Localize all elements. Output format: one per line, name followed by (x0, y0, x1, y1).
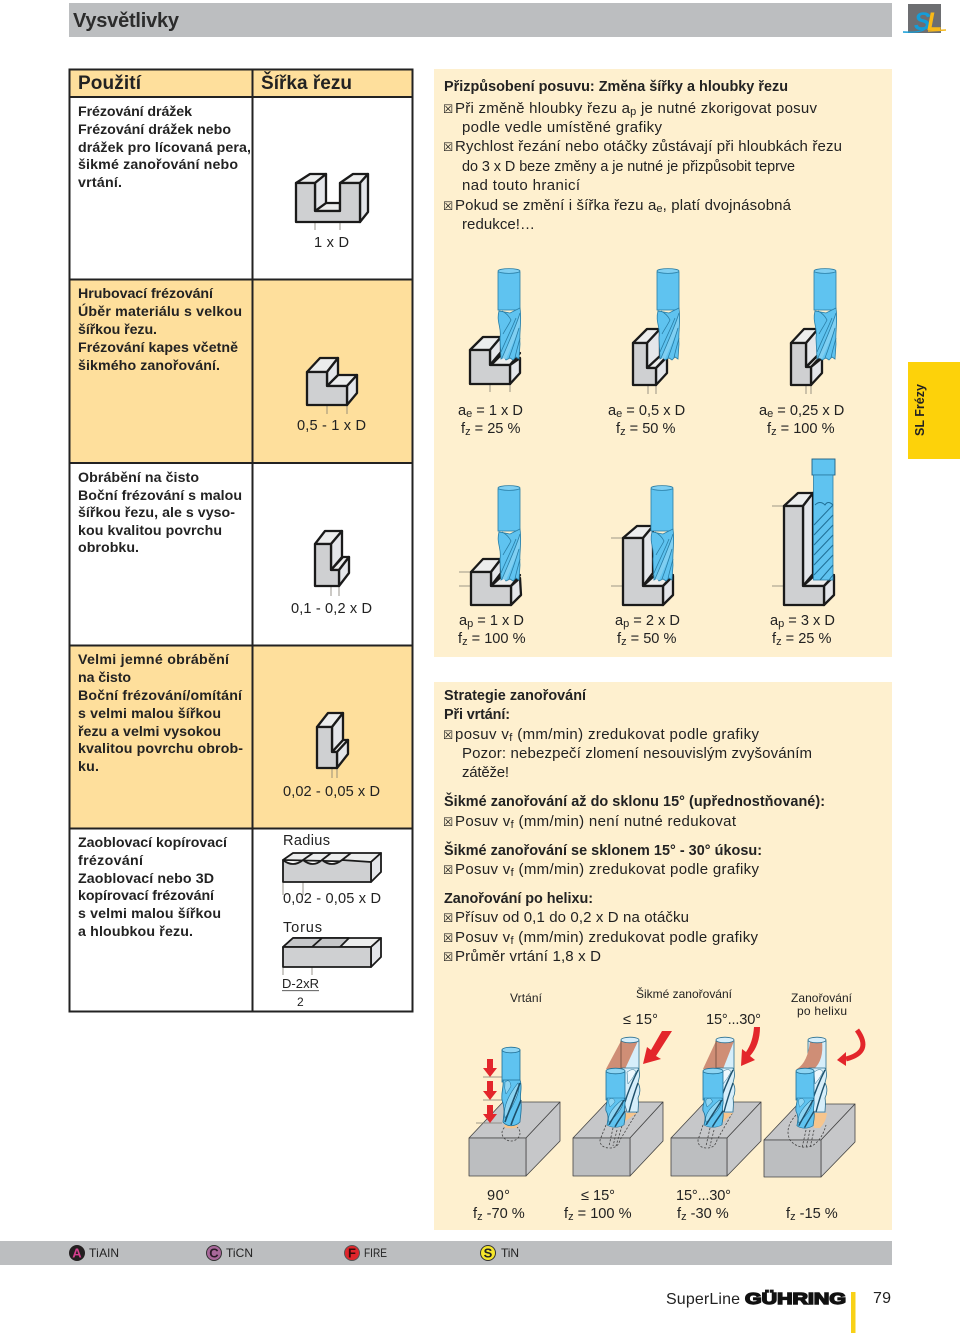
icon: SL logo: L (927, 8, 942, 36)
caption: ae = 0,25 x D: z (771, 426, 777, 438)
label: 0,5 - 1 x D: 0,5 - 1 x D (297, 418, 366, 434)
label: torus fraction: 2 (297, 995, 304, 1009)
text block: slot milling: Frézování drážek (78, 104, 192, 120)
icon: red ramp arrow (643, 1031, 672, 1064)
graphic: ramping up to 15 degrees (573, 1031, 672, 1176)
icon: SL logo (903, 4, 946, 36)
text block: feed adaptation: , platí dvojnásobná (663, 197, 792, 214)
heading: Šířka řezu: Šířka řezu (261, 72, 352, 94)
panel: plunging strategy (434, 682, 892, 1230)
caption: ap = 3 x D: p (778, 618, 784, 630)
caption: ap = 3 x D: = 3 x D (784, 613, 835, 629)
icon: radius block (283, 853, 381, 895)
caption: ae = 0,25 x D (759, 403, 844, 438)
text block: feed adaptation (443, 79, 842, 233)
graphic: width of cut 0,25 x D (791, 269, 837, 394)
side tab: SL Frézy (908, 362, 960, 459)
captions: plunging values: z (568, 1211, 574, 1223)
text block: feed adaptation: ☒ (443, 140, 453, 154)
captions: plunging values: -70 % (483, 1206, 525, 1222)
icon: step block 0,5 - 1 x D (307, 358, 357, 414)
text block: roughing: Hrubovací frézování (78, 286, 214, 302)
caption: ae = 0,5 x D: a (608, 403, 616, 419)
text block: plunging strategy: Posuv v (455, 813, 510, 830)
text block: slot milling: drážek pro lícovaná pera, (78, 140, 251, 156)
text block: fine finishing: kvalitou povrchu obrob- (78, 741, 243, 757)
text block: feed adaptation: nad touto hranicí (462, 177, 581, 194)
text block: plunging strategy: Zanořování po helixu: (444, 891, 593, 907)
text block: copy milling (78, 835, 228, 940)
caption: ap = 2 x D: = 2 x D (629, 613, 680, 629)
page number: 79 (873, 1290, 891, 1307)
caption: ae = 1 x D: z (465, 426, 471, 438)
caption: ae = 1 x D: e (466, 408, 472, 420)
labels: plunging types: ≤ 15° (623, 1012, 658, 1028)
label: torus fraction: D-2xR (282, 976, 319, 991)
text block: plunging strategy: Strategie zanořování (444, 688, 587, 704)
caption: ap = 3 x D: a (770, 613, 778, 629)
caption: ap = 1 x D: z (462, 636, 468, 648)
caption: ap = 1 x D: a (459, 613, 467, 629)
labels: plunging types: 15°...30° (706, 1012, 761, 1028)
label: 1 x D: 1 x D (314, 235, 349, 251)
text block: fine finishing: na čisto (78, 670, 131, 686)
legend: TiN: S (484, 1246, 493, 1260)
usage table (70, 70, 412, 1012)
text block: fine finishing: Velmi jemné obrábění (78, 652, 230, 668)
text block: roughing: Úběr materiálu s velkou (78, 302, 242, 320)
captions: plunging values: = 100 % (574, 1206, 632, 1222)
table grid (70, 70, 412, 1012)
caption: ap = 2 x D: = 50 % (627, 631, 676, 647)
text block: copy milling: frézování (78, 853, 144, 869)
text block: fine finishing: ku. (78, 759, 99, 775)
text block: feed adaptation: ☒ (443, 102, 453, 116)
footer brand: SuperLine (666, 1291, 740, 1308)
text block: roughing: šířkou řezu. (78, 322, 157, 338)
text block: feed adaptation: e (656, 203, 663, 215)
text block: copy milling: Zaoblovací nebo 3D (78, 871, 214, 887)
text block: copy milling: Zaoblovací kopírovací (78, 835, 228, 851)
text block: finishing (78, 470, 242, 556)
captions: plunging values (473, 1188, 838, 1223)
icon: step block 0,02 - 0,05 x D (317, 713, 348, 778)
header bar with title (69, 3, 892, 37)
legend: FIRE: FIRE (364, 1246, 387, 1260)
caption: ae = 0,5 x D (608, 403, 685, 438)
footer accent rule (851, 1292, 856, 1333)
caption: ap = 1 x D: = 1 x D (473, 613, 524, 629)
text block: feed adaptation: Při změně hloubky řezu a (455, 100, 630, 117)
text block: finishing: kou kvalitou povrchu (78, 523, 222, 539)
legend: TiAlN: TiAlN (89, 1246, 119, 1260)
text block: finishing: Obrábění na čisto (78, 470, 199, 486)
label: 0,1 - 0,2 x D: 0,1 - 0,2 x D (291, 601, 372, 617)
text block: copy milling: a hloubkou řezu. (78, 924, 193, 940)
text block: feed adaptation: Přizpůsobení posuvu: Změna šířky a hloubky řezu (444, 79, 788, 95)
graphic: ramping 15 to 30 degrees (671, 1027, 761, 1176)
text block: fine finishing (78, 652, 243, 775)
text block: plunging strategy: (mm/min) zredukovat podle grafiky (514, 929, 758, 946)
text block: feed adaptation: Rychlost řezání nebo otáčky zůstávají při hloubkách řezu (455, 138, 842, 155)
text block: slot milling: šikmé zanořování nebo (78, 157, 238, 173)
text block: plunging strategy: f (511, 867, 515, 879)
legend: FIRE: F (348, 1246, 356, 1260)
legend: TiN (480, 1246, 519, 1260)
table row fills (70, 70, 412, 828)
text block: plunging strategy: ☒ (443, 950, 453, 964)
text block: plunging strategy: Posuv v (455, 929, 510, 946)
text block: roughing (78, 286, 242, 374)
text block: roughing: šikmého zanořování. (78, 358, 220, 374)
text block: finishing: Boční frézování s malou (78, 488, 242, 504)
caption: ap = 2 x D: a (615, 613, 623, 629)
captions: plunging values: -30 % (687, 1206, 729, 1222)
label: 0,02 - 0,05 x D: 0,02 - 0,05 x D (283, 891, 381, 907)
legend: TiN: TiN (501, 1246, 519, 1260)
text block: slot milling: vrtání. (78, 175, 122, 191)
caption: ae = 0,25 x D: e (767, 408, 773, 420)
text block: feed adaptation: je nutné zkorigovat posuv (637, 100, 818, 117)
graphic: width of cut 1 x D (470, 269, 521, 392)
icon: red helical arrow (837, 1030, 863, 1066)
caption: ae = 1 x D: = 1 x D (472, 403, 523, 419)
text block: plunging strategy: f (509, 732, 513, 744)
caption: ap = 2 x D: f (617, 631, 621, 647)
caption: ae = 0,25 x D: f (767, 421, 771, 437)
text block: plunging strategy: ☒ (443, 931, 453, 945)
caption: ae = 0,5 x D: f (616, 421, 620, 437)
text block: plunging strategy: posuv v (455, 726, 509, 743)
text block: feed adaptation: p (630, 106, 636, 118)
text block: plunging strategy: ☒ (443, 911, 453, 925)
text block: feed adaptation: Pokud se změní i šířka řezu a (455, 197, 656, 214)
legend bar: coatings (0, 1241, 892, 1265)
caption: ap = 1 x D: f (458, 631, 462, 647)
text block: plunging strategy: Při vrtání: (444, 707, 510, 723)
text block: fine finishing: s velmi malou šířkou (78, 706, 221, 722)
text block: fine finishing: Boční frézování/omítání (78, 688, 243, 704)
icon: red curved arrow (741, 1027, 760, 1066)
captions: plunging values: -15 % (796, 1206, 838, 1222)
label: Radius: Radius (283, 833, 330, 849)
caption: ap = 3 x D: = 25 % (782, 631, 831, 647)
legend: TiAlN: A (72, 1246, 82, 1260)
graphic: depth of cut 2 x D (611, 486, 674, 605)
legend: TiCN: TiCN (226, 1246, 253, 1260)
text block: plunging strategy: (mm/min) není nutné redukovat (514, 813, 737, 830)
text block: plunging strategy: Přísuv od 0,1 do 0,2 x D na otáčku (455, 909, 689, 926)
text block: plunging strategy: (mm/min) zredukovat podle grafiky (514, 861, 760, 878)
caption: ap = 3 x D (770, 613, 835, 648)
captions: plunging values: 90° (487, 1188, 510, 1204)
text block: copy milling: kopírovací frézování (78, 888, 215, 904)
text block: plunging strategy: ☒ (443, 815, 453, 829)
caption: ap = 2 x D: z (621, 636, 627, 648)
legend: TiAlN (69, 1245, 119, 1261)
text block: slot milling (78, 104, 251, 191)
label: torus fraction (282, 976, 319, 1009)
text block: plunging strategy: f (510, 935, 514, 947)
text block: plunging strategy: Pozor: nebezpečí zlomení nesouvislým zvyšováním (462, 745, 812, 762)
text block: roughing: Frézování kapes včetně (78, 340, 238, 356)
captions: plunging values: f (786, 1206, 790, 1222)
caption: ap = 2 x D (615, 613, 680, 648)
caption: ae = 0,5 x D: = 50 % (626, 421, 675, 437)
icon: torus block (283, 938, 381, 975)
captions: plunging values: z (477, 1211, 483, 1223)
text block: slot milling: Frézování drážek nebo (78, 122, 231, 138)
text block: plunging strategy: Posuv v (455, 861, 510, 878)
captions: plunging values: z (790, 1211, 796, 1223)
icon: SL logo: S (914, 8, 931, 36)
text block: feed adaptation: podle vedle umístěné grafiky (462, 119, 662, 136)
caption: ae = 0,5 x D: z (620, 426, 626, 438)
graphic: width of cut 0,5 x D (633, 269, 680, 394)
caption: ae = 0,25 x D: a (759, 403, 767, 419)
caption: ae = 1 x D: a (458, 403, 466, 419)
captions: plunging values: z (681, 1211, 687, 1223)
text block: plunging strategy: f (511, 819, 515, 831)
caption: ae = 1 x D (458, 403, 523, 438)
text block: plunging strategy: Šikmé zanořování se sklonem 15° - 30° úkosu: (444, 841, 762, 859)
captions: plunging values: ≤ 15° (581, 1188, 615, 1204)
heading: Použití: Použití (78, 73, 142, 94)
labels: plunging types: po helixu (797, 1004, 847, 1018)
panel: feed adaptation (434, 69, 892, 657)
graphic: drilling (469, 1047, 560, 1176)
captions: plunging values: f (473, 1206, 477, 1222)
text block: plunging strategy: Šikmé zanořování až do sklonu 15° (upřednostňované): (444, 792, 825, 810)
text block: plunging strategy: (mm/min) zredukovat podle grafiky (513, 726, 760, 743)
caption: ap = 1 x D: = 100 % (468, 631, 526, 647)
captions: plunging values: f (677, 1206, 681, 1222)
text block: feed adaptation: redukce!… (462, 216, 535, 233)
labels: plunging types: Šikmé zanořování (636, 986, 733, 1001)
caption: ae = 0,5 x D: e (616, 408, 622, 420)
caption: ap = 2 x D: p (623, 618, 629, 630)
text block: fine finishing: řezu a velmi vysokou (78, 724, 221, 740)
legend: FIRE (344, 1246, 387, 1260)
caption: ae = 1 x D: f (461, 421, 465, 437)
header bar with title: Vysvětlivky (73, 10, 180, 32)
icon: drilling arrows (483, 1059, 497, 1123)
legend: TiCN (206, 1246, 253, 1260)
text block: feed adaptation: ☒ (443, 199, 453, 213)
text block: finishing: obrobku. (78, 540, 139, 556)
caption: ap = 3 x D: z (776, 636, 782, 648)
caption: ap = 1 x D (458, 613, 526, 648)
icon: slot block 1 x D (296, 174, 368, 230)
labels: plunging types (510, 986, 853, 1028)
labels: plunging types: Vrtání (510, 991, 543, 1005)
text block: plunging strategy (443, 688, 825, 965)
side tab: SL Frézy: SL Frézy (913, 384, 927, 436)
caption: ap = 1 x D: p (467, 618, 473, 630)
text block: plunging strategy: ☒ (443, 728, 453, 742)
text block: finishing: šířkou řezu, ale s vyso- (78, 505, 235, 521)
footer brand: GÜHRING (745, 1289, 846, 1308)
label: 0,02 - 0,05 x D: 0,02 - 0,05 x D (283, 784, 380, 800)
footer brand (666, 1289, 846, 1308)
graphic: depth of cut 1 x D (459, 486, 521, 605)
caption: ae = 0,25 x D: = 100 % (777, 421, 835, 437)
label: Torus: Torus (283, 920, 322, 936)
captions: plunging values: f (564, 1206, 568, 1222)
caption: ae = 0,25 x D: = 0,25 x D (773, 403, 844, 419)
text block: plunging strategy: Průměr vrtání 1,8 x D (455, 948, 601, 965)
text block: plunging strategy: ☒ (443, 863, 453, 877)
labels: plunging types: Zanořování (791, 991, 853, 1005)
graphic: helical plunging (764, 1030, 863, 1177)
text block: copy milling: s velmi malou šířkou (78, 906, 221, 922)
captions: plunging values: 15°...30° (676, 1188, 731, 1204)
caption: ae = 0,5 x D: = 0,5 x D (622, 403, 685, 419)
caption: ae = 1 x D: = 25 % (471, 421, 520, 437)
legend: TiCN: C (209, 1246, 219, 1260)
text block: feed adaptation: do 3 x D beze změny a je nutné je přizpůsobit teprve (462, 159, 795, 175)
text block: plunging strategy: zátěže! (462, 764, 509, 781)
caption: ap = 3 x D: f (772, 631, 776, 647)
icon: step block 0,1 - 0,2 x D (315, 531, 349, 596)
graphic: depth of cut 3 x D (772, 459, 835, 605)
